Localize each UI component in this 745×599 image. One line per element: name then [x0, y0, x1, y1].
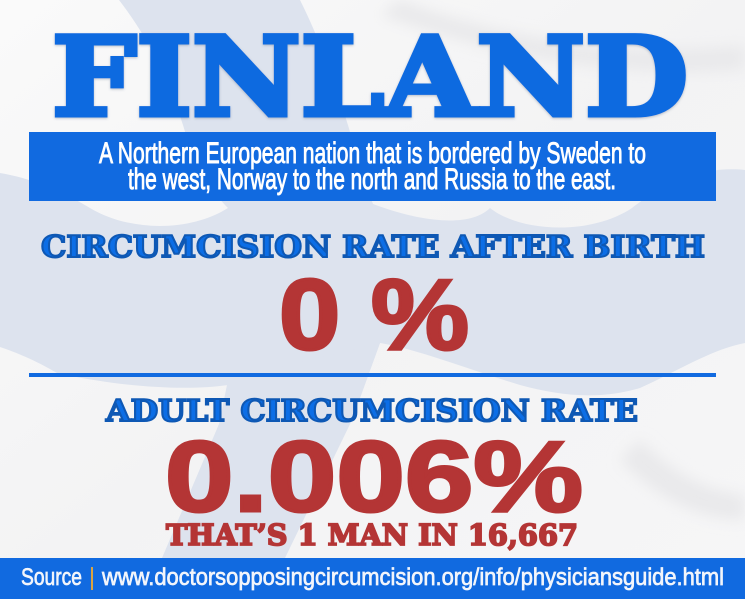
stat: 0.006 percent: 0.006%: [165, 421, 583, 533]
divider line: [29, 373, 716, 377]
description text: [99, 137, 646, 196]
callout: 1 man in 16,667: THAT’S 1 MAN IN 16,667: [166, 518, 578, 552]
heading: circumcision rate after birth: CIRCUMCISION RATE AFTER BIRTH: [41, 230, 705, 265]
description banner: [29, 132, 716, 201]
flag cross: lower vertical band: [162, 343, 380, 558]
flag cross: horizontal band: [0, 0, 745, 420]
separator: [91, 567, 93, 590]
footer bar: source: [0, 558, 745, 599]
title: FINLAND: FINLAND: [52, 13, 688, 141]
source label: Source: [21, 564, 82, 591]
stat: 0 percent: 0 %: [279, 259, 469, 371]
heading: adult circumcision rate: ADULT CIRCUMCISION RATE: [105, 394, 638, 429]
